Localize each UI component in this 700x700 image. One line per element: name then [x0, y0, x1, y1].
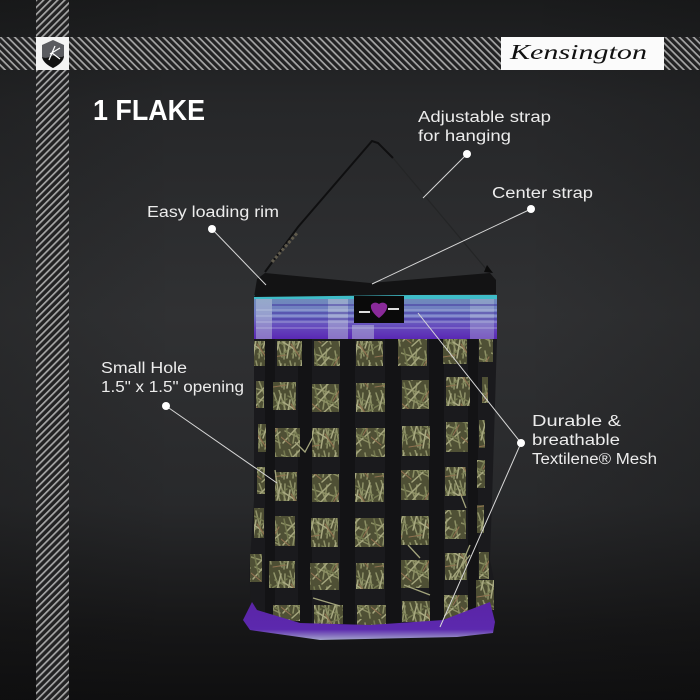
- callout: small hole: Small Hole: [101, 360, 187, 377]
- teal trim edge: [254, 295, 497, 299]
- brand logo: Kensington: [501, 37, 664, 70]
- callout: adjustable strap: Adjustable strap: [418, 109, 551, 126]
- hay bag: [243, 273, 497, 640]
- vertical striped band: [36, 0, 69, 700]
- callout: durable mesh: Textilene® Mesh: [532, 451, 657, 468]
- icon: K shield logo: [36, 37, 69, 70]
- callout: durable mesh: [418, 313, 657, 627]
- callout: durable mesh: Durable &: [532, 413, 622, 430]
- callout: center strap: [372, 185, 593, 284]
- callout: easy loading rim: [147, 204, 279, 285]
- hay openings: [250, 336, 494, 625]
- callout: easy loading rim: Easy loading rim: [147, 204, 279, 221]
- bottom purple trim: [243, 602, 495, 640]
- callout: adjustable strap: for hanging: [418, 128, 511, 145]
- brand logo: Kensington: Kensington: [509, 40, 647, 64]
- bag body: [249, 339, 497, 626]
- loose hay strands: [275, 437, 470, 606]
- callout: adjustable strap: [418, 109, 551, 198]
- callout: center strap: Center strap: [492, 185, 593, 202]
- callout: durable mesh: breathable: [532, 432, 620, 449]
- callout: small hole: [101, 360, 277, 483]
- horizontal striped band: [0, 37, 700, 70]
- title: 1 FLAKE: [93, 95, 205, 127]
- hanging strap: [265, 141, 493, 273]
- black rim: [254, 273, 496, 297]
- callout: small hole: 1.5" x 1.5" opening: [101, 379, 244, 396]
- woven label: [354, 296, 404, 323]
- plaid trim: [254, 295, 497, 339]
- vertical webbing straps: [265, 339, 478, 625]
